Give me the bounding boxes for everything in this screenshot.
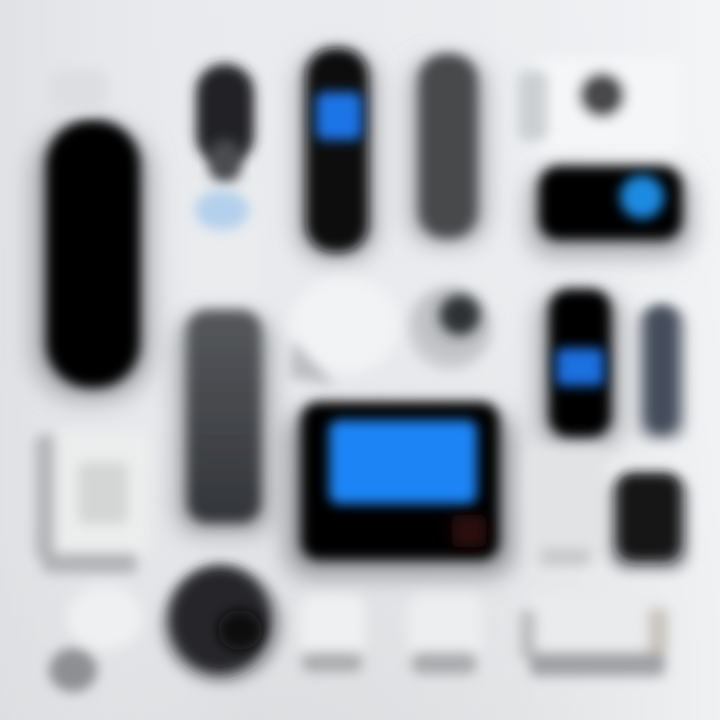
device: black remote with blue band xyxy=(538,289,622,446)
device: black remote with blue display xyxy=(298,48,376,259)
device: second white module xyxy=(408,595,482,674)
device: round black puck xyxy=(160,565,284,685)
device: white speaker top right xyxy=(518,58,680,153)
device: tablet with blue screen xyxy=(286,402,514,576)
blue button glow xyxy=(195,190,249,230)
lens xyxy=(440,295,480,335)
device: white panel lower right xyxy=(528,450,606,566)
device: grey remote third column xyxy=(410,54,486,244)
device: small black square xyxy=(608,473,690,572)
red indicator xyxy=(452,515,486,547)
blue light xyxy=(620,175,664,219)
blue band xyxy=(556,348,604,386)
blue display xyxy=(316,92,362,140)
device: small white module xyxy=(300,595,365,672)
speaker dot xyxy=(579,72,625,118)
device: white keypad lower left xyxy=(35,430,150,573)
device: grey remote lower second column xyxy=(176,310,272,534)
device: white round puck bottom left xyxy=(49,586,143,692)
device: tall black pill remote xyxy=(32,70,152,400)
device: white base station xyxy=(520,595,668,676)
device: slim blue-grey remote xyxy=(634,305,688,442)
blue screen xyxy=(329,420,477,504)
device: white dome with camera lens xyxy=(290,277,492,385)
device: black hub with blue light xyxy=(528,166,692,256)
device: dark remote top second column xyxy=(185,64,259,305)
